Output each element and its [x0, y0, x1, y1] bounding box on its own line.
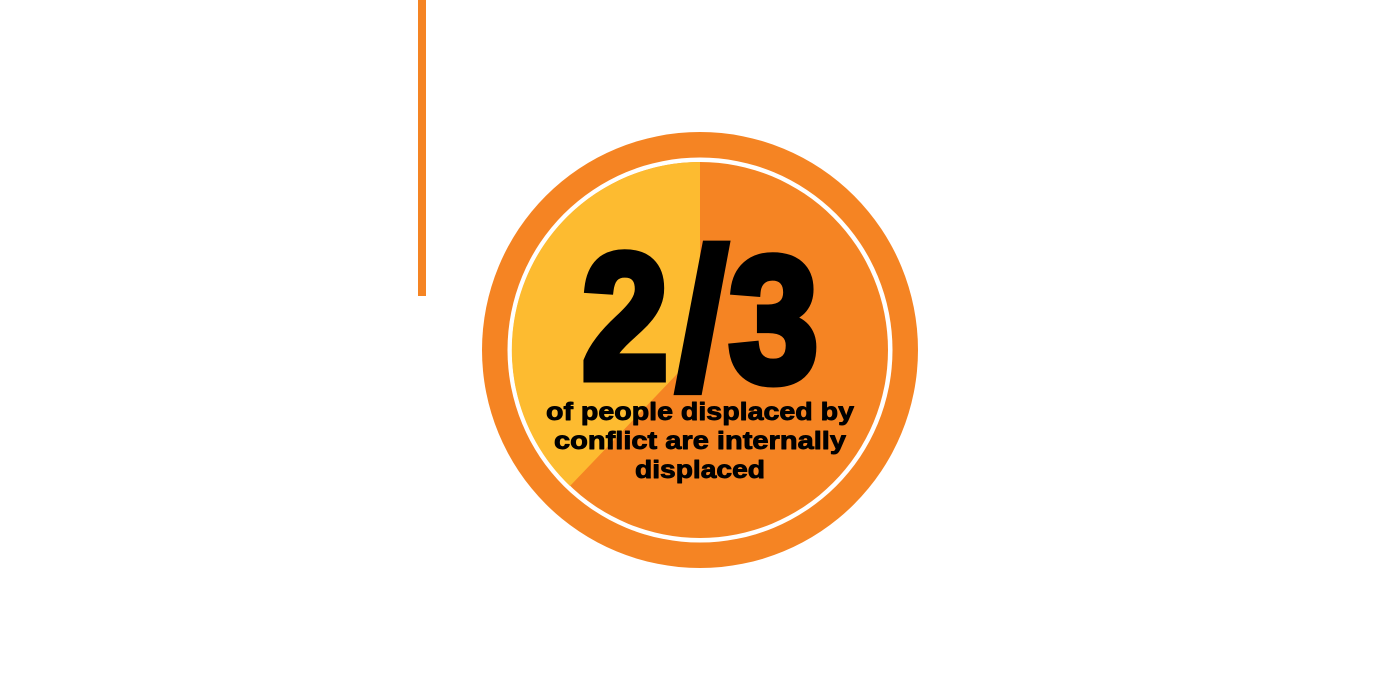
- yellow pie wedge: [512, 162, 700, 486]
- outer orange disc: [482, 132, 918, 568]
- circular badge: [482, 132, 918, 568]
- white ring: [508, 158, 892, 542]
- big statistic 2/3: [582, 206, 818, 432]
- vertical accent bar: [418, 0, 426, 296]
- caption: [546, 398, 854, 484]
- caption line 1: of people displaced by: [546, 398, 854, 426]
- inner orange pie: [512, 162, 888, 538]
- digit 3: 3: [729, 220, 818, 419]
- caption line 2: conflict are internally: [554, 427, 846, 455]
- slash: /: [674, 206, 730, 432]
- caption line 3: displaced: [635, 456, 765, 484]
- digit 2: 2: [582, 218, 668, 416]
